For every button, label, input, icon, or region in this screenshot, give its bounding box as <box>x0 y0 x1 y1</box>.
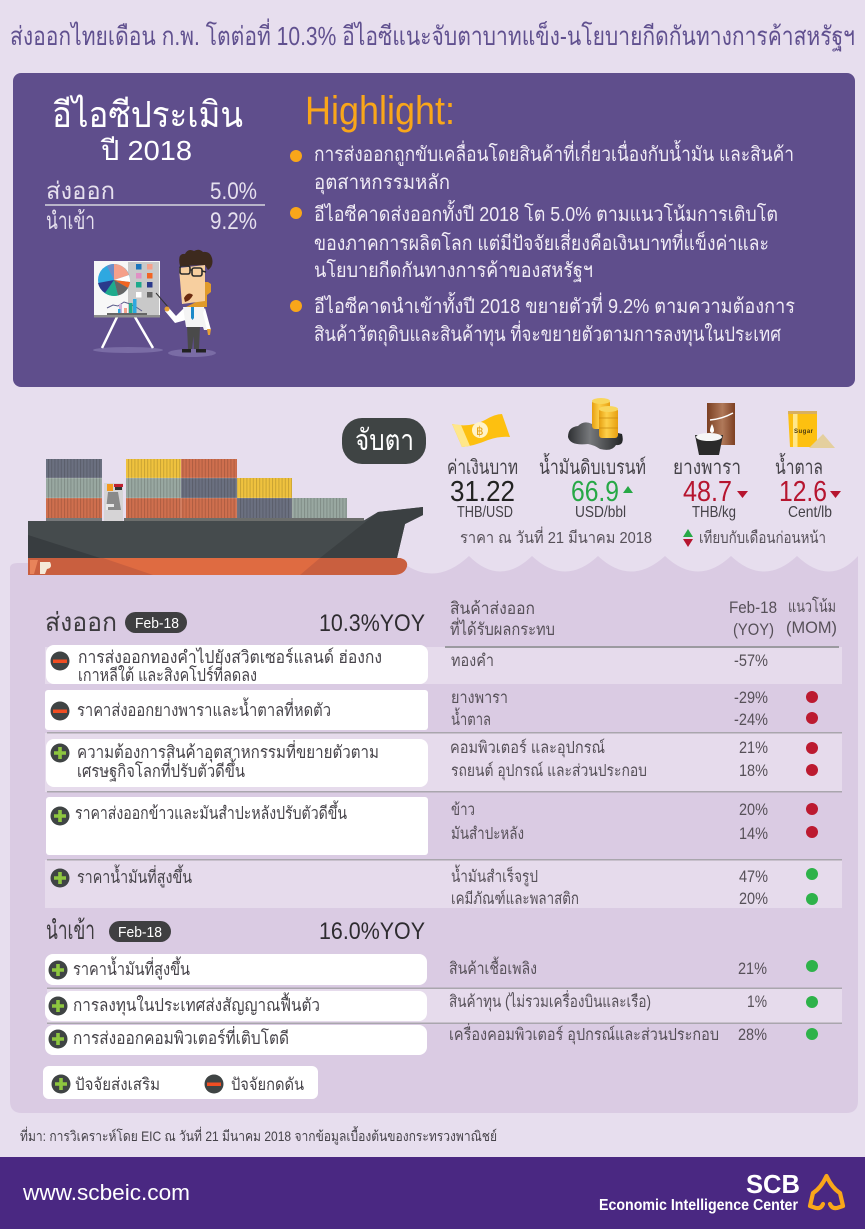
stat: baht: 31.22 <box>450 476 515 508</box>
forecast table <box>45 178 265 235</box>
table header: (YOY) <box>733 620 774 639</box>
factor: industrial demand <box>46 739 428 787</box>
stat: Brent crude <box>539 453 646 521</box>
import products table rows: สินค้าทุน (ไม่รวมเครื่องบินและเรือ) <box>449 990 651 1012</box>
factor: computer exports: การส่งออกคอมพิวเตอร์ที่เติบโตดี <box>73 1026 289 1048</box>
export products table rows: น้ำมันสำเร็จรูป <box>451 864 538 887</box>
factor: rubber and sugar prices fell <box>45 690 428 730</box>
export section heading: ส่งออก <box>45 607 117 637</box>
forecast table: 5.0% <box>210 178 257 205</box>
export products table rows: 18% <box>739 762 768 780</box>
stat: Brent crude: น้ำมันดิบเบรนท์ <box>539 453 646 479</box>
export products table rows: -24% <box>734 711 768 729</box>
export products table rows: ทองคำ <box>451 652 494 670</box>
stat: Brent crude: 66.9 <box>571 476 619 508</box>
factor: industrial demand: ความต้องการสินค้าอุตสาหกรรมที่ขยายตัวตาม <box>77 740 379 763</box>
bullet: import forecast: อีไอซีคาดนำเข้าทั้งปี 2018 ขยายตัวที่ 9.2% ตามความต้องการ <box>314 292 795 318</box>
import products table rows <box>449 956 818 1045</box>
factor: rubber and sugar prices fell: ราคาส่งออกยางพาราและน้ำตาลที่หดตัว <box>77 697 331 720</box>
export products table rows: 14% <box>739 825 768 843</box>
export products table rows: 47% <box>739 868 768 886</box>
export products table rows: รถยนต์ อุปกรณ์ และส่วนประกอบ <box>451 761 647 781</box>
factor: gold exports fell: เกาหลีใต้ และสิงคโปร์ที่ลดลง <box>78 663 257 685</box>
icon: gold flag baht: ฿ <box>476 424 484 438</box>
export products table rows: -29% <box>734 689 768 707</box>
import products table rows: สินค้าเชื้อเพลิง <box>449 956 537 978</box>
legend: factors: ปัจจัยส่งเสริม <box>75 1075 160 1094</box>
bullet: export forecast: นโยบายกีดกันทางการค้าของสหรัฐฯ <box>314 259 593 282</box>
export products table rows: เคมีภัณฑ์และพลาสติก <box>451 889 579 908</box>
forecast table: ส่งออก <box>46 178 115 205</box>
footer <box>0 1157 865 1229</box>
factor: gold exports fell: การส่งออกทองคำไปยังสวิตเซอร์แลนด์ ฮ่องกง <box>78 647 382 667</box>
import section heading <box>46 915 425 945</box>
stat: sugar <box>775 453 841 521</box>
stat: rubber: 48.7 <box>683 476 732 508</box>
factor: rice and tapioca <box>46 797 428 855</box>
export products table rows: คอมพิวเตอร์ และอุปกรณ์ <box>450 738 605 758</box>
bullet: export forecast: อีไอซีคาดส่งออกทั้งปี 2018 โต 5.0% ตามแนวโน้มการเติบโต <box>314 200 778 226</box>
import products table rows: 1% <box>747 993 767 1011</box>
callout: watch list pill: จับตา <box>355 425 414 457</box>
import products table rows: 28% <box>738 1026 767 1044</box>
import section heading: นำเข้า <box>46 915 95 945</box>
export section heading: 10.3%YOY <box>319 610 425 637</box>
table header <box>450 596 837 639</box>
stat: sugar: 12.6 <box>779 476 827 508</box>
stat: baht <box>447 457 518 521</box>
forecast table: 9.2% <box>210 208 257 235</box>
legend: factors: ปัจจัยกดดัน <box>231 1075 304 1094</box>
factor: computer exports <box>45 1025 427 1055</box>
bullet: export drivers: การส่งออกถูกขับเคลื่อนโดยสินค้าที่เกี่ยวเนื่องกับน้ำมัน และสินค้า <box>314 140 794 167</box>
import products table rows: เครื่องคอมพิวเตอร์ อุปกรณ์และส่วนประกอบ <box>449 1023 719 1045</box>
icon: rubber latex <box>695 403 735 455</box>
brand name: SCB <box>746 1169 800 1199</box>
export products table rows: ยางพารา <box>451 689 508 707</box>
export section heading <box>45 607 425 637</box>
export products table rows: มันสำปะหลัง <box>451 825 524 843</box>
heading: EIC forecast: อีไอซีประเมิน <box>52 94 243 135</box>
legend: compare with previous month: เทียบกับเดือนก่อนหน้า <box>699 529 826 547</box>
import row band <box>47 988 842 1024</box>
bullet: export forecast <box>290 200 778 282</box>
factor: oil prices: ราคาน้ำมันที่สูงขึ้น <box>77 864 192 888</box>
website: www.scbeic.com <box>22 1180 190 1205</box>
factor: rice and tapioca: ราคาส่งออกข้าวและมันสำปะหลังปรับตัวดีขึ้น <box>75 800 347 823</box>
bullet: export forecast: ของภาคการผลิตโลก แต่มีปัจจัยเสี่ยงคือเงินบาทที่แข็งค่าและ <box>314 229 769 255</box>
export products table rows: 20% <box>739 890 768 908</box>
panel: highlight <box>13 73 855 387</box>
forecast table: นำเข้า <box>46 208 95 235</box>
export products table rows: 20% <box>739 801 768 819</box>
bullet: import forecast: สินค้าวัตถุดิบและสินค้าทุน ที่จะขยายตัวตามการลงทุนในประเทศ <box>314 320 781 347</box>
icon: gold flag baht <box>452 414 510 447</box>
factor: domestic investment <box>45 991 427 1021</box>
import section heading: 16.0%YOY <box>319 918 425 945</box>
source note: ที่มา: การวิเคราะห์โดย EIC ณ วันที่ 21 มีนาคม 2018 จากข้อมูลเบื้องต้นของกระทรวงพาณิชย์ <box>20 1126 497 1145</box>
table header: แนวโน้ม <box>788 596 836 616</box>
export products table rows: น้ำตาล <box>451 707 491 729</box>
stat: Brent crude: USD/bbl <box>575 504 626 521</box>
bullet: export drivers: อุตสาหกรรมหลัก <box>314 172 450 195</box>
table header: (MOM) <box>786 618 837 637</box>
stat: rubber: THB/kg <box>692 504 736 521</box>
table header: ที่ได้รับผลกระทบ <box>450 617 555 639</box>
factor: domestic investment: การลงทุนในประเทศส่งสัญญาณฟื้นตัว <box>73 992 320 1016</box>
heading: year: ปี 2018 <box>100 135 192 166</box>
export section heading: Feb-18 <box>135 615 179 632</box>
note: price date: ราคา ณ วันที่ 21 มีนาคม 2018 <box>460 526 652 547</box>
icon: sugar bag <box>788 411 835 448</box>
legend: factors <box>43 1066 318 1099</box>
factor: oil prices <box>50 864 192 888</box>
factor: import oil prices: ราคาน้ำมันที่สูงขึ้น <box>73 956 190 980</box>
stat: rubber <box>673 457 748 521</box>
icon: sugar bag: Sugar <box>794 429 814 435</box>
stat: rubber: ยางพารา <box>673 457 741 479</box>
icon: SCB logo <box>810 1176 843 1208</box>
callout: watch list pill <box>342 418 426 464</box>
row bands <box>45 646 842 908</box>
icon: presenter with chart board <box>93 250 216 357</box>
export products table rows <box>450 652 818 908</box>
table header: สินค้าส่งออก <box>450 599 535 618</box>
stat: baht: ค่าเงินบาท <box>447 457 518 479</box>
import products table rows: 21% <box>738 960 767 978</box>
import section heading: Feb-18 <box>118 924 162 941</box>
table header: Feb-18 <box>729 598 777 617</box>
stat: sugar: Cent/lb <box>788 504 832 521</box>
bullet: import forecast <box>290 292 795 347</box>
factor: industrial demand: เศรษฐกิจโลกที่ปรับตัวดีขึ้น <box>77 758 245 782</box>
icon: container ship <box>28 459 423 575</box>
bullet: export drivers <box>290 140 794 195</box>
factor: gold exports fell <box>46 645 428 685</box>
export products table rows: -57% <box>734 652 768 670</box>
export products table rows: 21% <box>739 739 768 757</box>
stat: baht: THB/USD <box>457 504 513 521</box>
brand subtitle: Economic Intelligence Center <box>599 1197 798 1214</box>
heading: Highlight: Highlight: <box>305 89 455 133</box>
icon: oil cloud and gold barrels <box>568 398 623 450</box>
export products table rows: ข้าว <box>451 801 475 819</box>
panel: lower lilac wave background <box>10 556 858 1113</box>
factor: import oil prices <box>45 954 427 985</box>
stat: sugar: น้ำตาล <box>775 453 823 479</box>
